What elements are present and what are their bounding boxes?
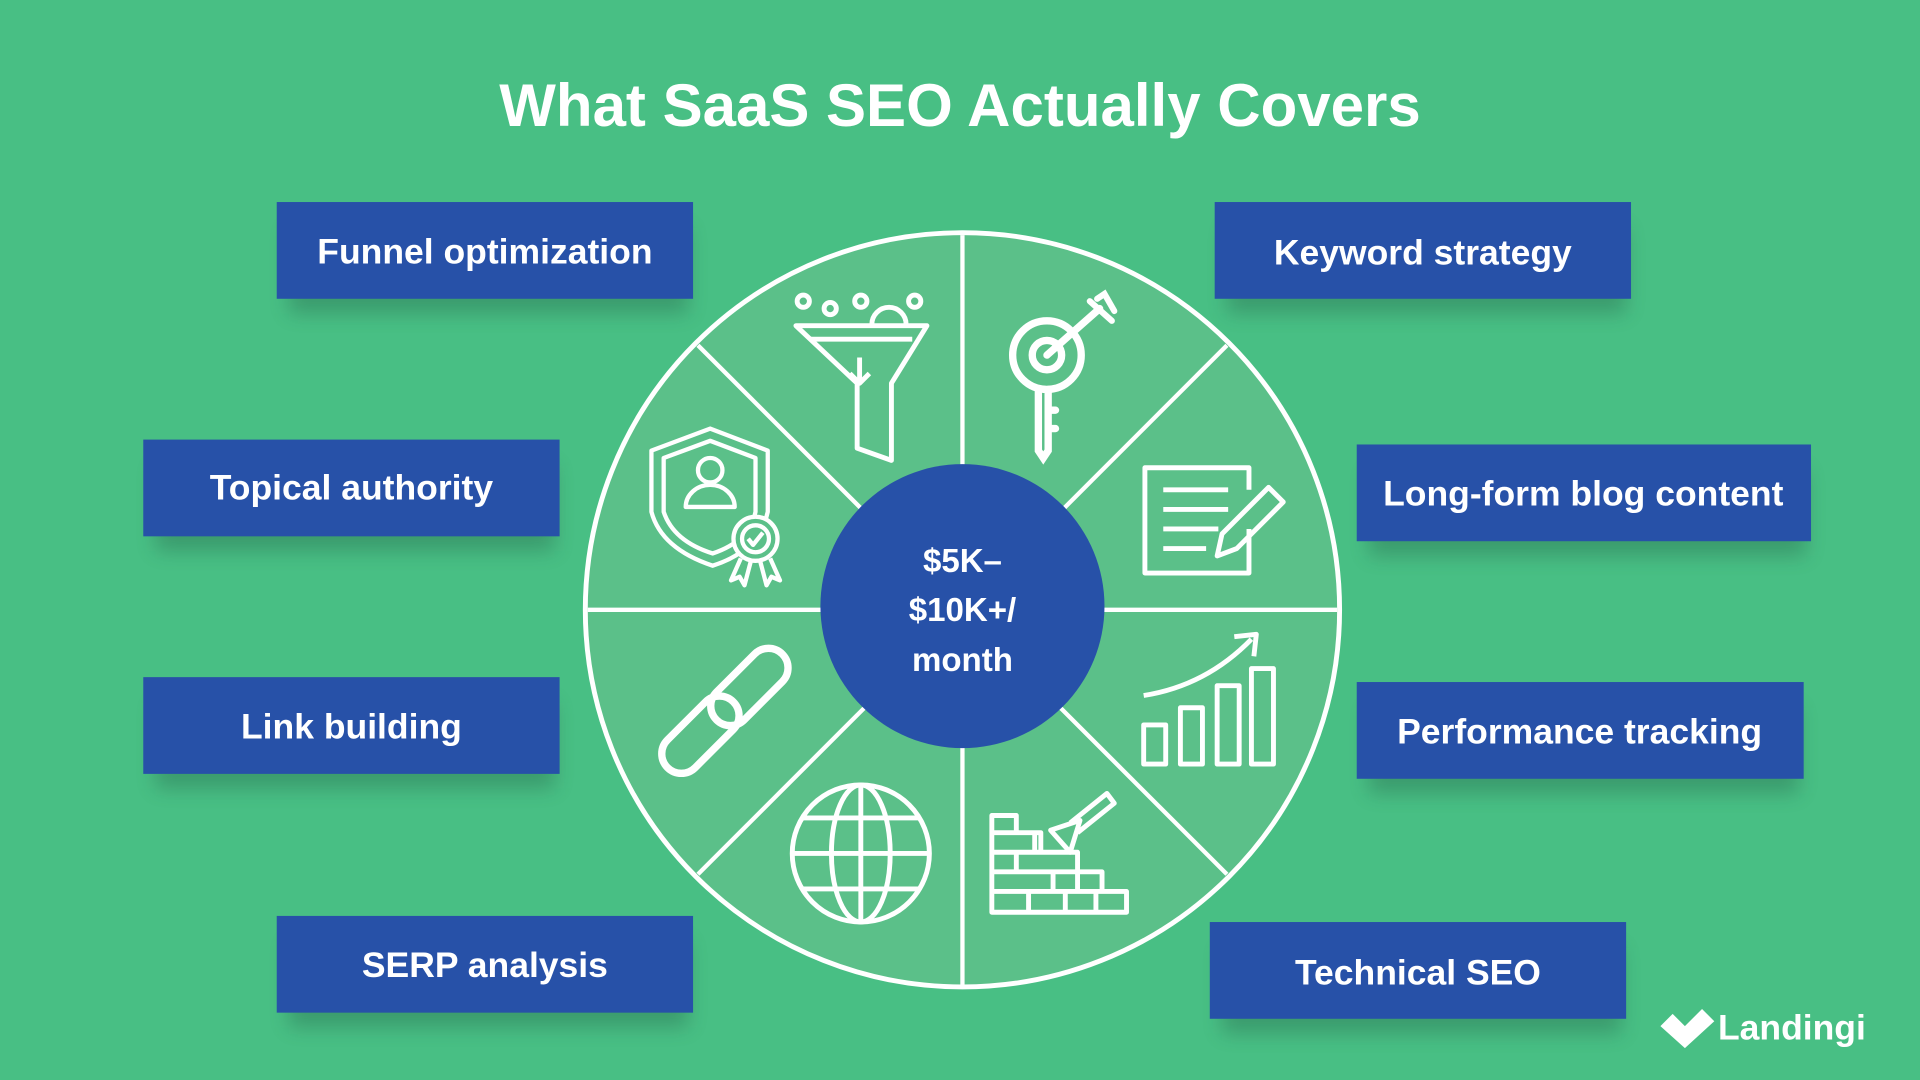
icon: funnel <box>796 295 927 460</box>
label: Technical SEO <box>1210 922 1626 1033</box>
label: Funnel optimization <box>277 202 693 313</box>
icon: target key <box>1013 294 1114 458</box>
label: Keyword strategy <box>1215 202 1631 313</box>
center price circle: month <box>912 642 1013 679</box>
label: Keyword strategy: Keyword strategy <box>1274 232 1572 272</box>
icon: bar chart <box>1144 634 1273 764</box>
icon: brick wall with trowel <box>992 793 1127 912</box>
center price circle: $10K+/ <box>909 592 1016 629</box>
label: SERP analysis <box>277 916 693 1027</box>
label: Long-form blog content: Long-form blog content <box>1383 474 1784 514</box>
wheel <box>585 233 1340 987</box>
label: Topical authority <box>143 440 560 551</box>
label: Topical authority: Topical authority <box>210 468 493 508</box>
label: Technical SEO: Technical SEO <box>1295 952 1541 992</box>
logo: Landingi: Landingi <box>1718 1008 1866 1048</box>
label: Link building <box>143 677 560 789</box>
icon: globe <box>792 785 929 922</box>
label: Long-form blog content <box>1357 444 1811 556</box>
label: Performance tracking <box>1357 682 1804 793</box>
label: Performance tracking: Performance tracking <box>1397 711 1762 751</box>
label: SERP analysis: SERP analysis <box>362 945 608 985</box>
label: Funnel optimization: Funnel optimization <box>317 231 653 271</box>
center price circle <box>820 464 1104 748</box>
title: What SaaS SEO Actually Covers <box>499 72 1421 139</box>
icon: document with pen <box>1145 468 1283 573</box>
center price circle: $5K– <box>923 543 1002 580</box>
label: Link building: Link building <box>241 706 462 746</box>
icon: chain link <box>654 640 796 781</box>
icon: shield with badge <box>651 429 780 585</box>
